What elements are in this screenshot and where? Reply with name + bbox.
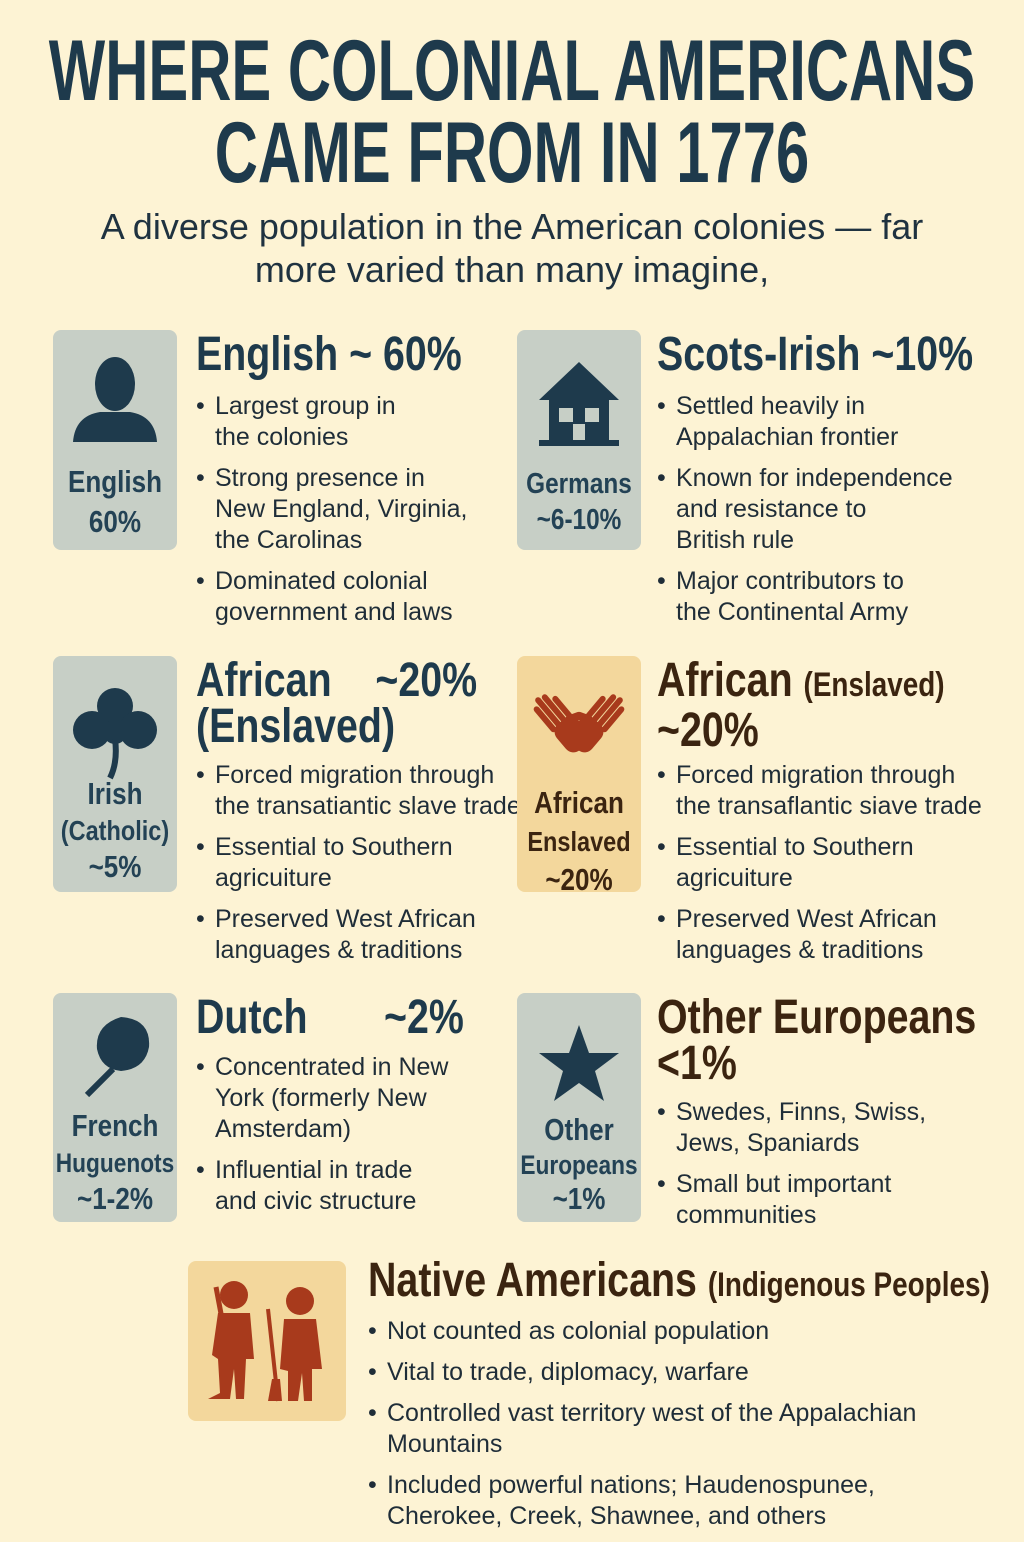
icon box: French Huguenots: Huguenots xyxy=(56,1148,174,1178)
bullets: Amsterdam) xyxy=(215,1115,351,1143)
bullets: government and laws xyxy=(215,598,453,626)
bullets: Vital to trade, diplomacy, warfare xyxy=(387,1358,749,1386)
bullets: York (formerly New xyxy=(215,1084,427,1112)
panel: Other Europeans xyxy=(517,991,976,1229)
heading: ~20% xyxy=(657,704,759,757)
bullets: agricuiture xyxy=(676,864,793,892)
heading: African ~20% xyxy=(196,654,477,707)
heading: <1% xyxy=(657,1037,737,1090)
icon: tulip xyxy=(84,1017,150,1097)
icon: house xyxy=(539,362,619,446)
title xyxy=(48,23,975,201)
icon box: English: 60% xyxy=(89,504,141,539)
subtitle: A diverse population in the American colonies — far xyxy=(101,206,923,247)
icon box: Irish: (Catholic) xyxy=(61,815,169,846)
bullets: Concentrated in New xyxy=(215,1053,448,1081)
icon box: Other Europeans: Europeans xyxy=(520,1150,638,1180)
icon box: African Enslaved: African xyxy=(534,785,624,820)
bullets xyxy=(658,761,982,964)
bullets: the Carolinas xyxy=(215,526,362,554)
heading: English ~ 60% xyxy=(196,328,462,381)
bullets: Essential to Southern xyxy=(215,833,453,861)
bullets: Not counted as colonial population xyxy=(387,1317,769,1345)
icon box: English xyxy=(53,330,177,550)
heading: (Enslaved) xyxy=(196,700,395,753)
heading xyxy=(196,654,477,753)
subtitle: more varied than many imagine, xyxy=(255,249,769,290)
bullets: Essential to Southern xyxy=(676,833,914,861)
bullets: languages & traditions xyxy=(676,936,923,964)
panel: African (left) xyxy=(53,654,521,964)
bullets: Swedes, Finns, Swiss, xyxy=(676,1098,926,1126)
bullets: Small but important xyxy=(676,1170,891,1198)
bullets: Forced migration through xyxy=(676,761,955,789)
bullets: Forced migration through xyxy=(215,761,494,789)
icon box: Germans xyxy=(517,330,641,550)
bullets xyxy=(369,1317,916,1530)
icon: person xyxy=(73,357,157,442)
bullets: Largest group in xyxy=(215,392,396,420)
bullets xyxy=(658,1098,926,1229)
icon box: English: English xyxy=(68,464,162,499)
bullets: Known for independence xyxy=(676,464,953,492)
icon box: Irish: Irish xyxy=(88,776,142,811)
bullets: Major contributors to xyxy=(676,567,904,595)
icon box: Irish xyxy=(53,656,177,892)
icon box: Germans: Germans xyxy=(526,468,632,500)
bullets: communities xyxy=(676,1201,816,1229)
panel: Dutch xyxy=(53,991,464,1222)
heading: Native Americans (Indigenous Peoples) xyxy=(368,1254,990,1307)
bullets xyxy=(197,392,467,626)
subtitle xyxy=(100,206,923,290)
bullets: Jews, Spaniards xyxy=(676,1129,859,1157)
title: WHERE COLONIAL AMERICANS xyxy=(49,23,975,119)
bullets: Settled heavily in xyxy=(676,392,865,420)
icon box: Irish: ~5% xyxy=(89,849,141,884)
bullets: the transaflantic siave trade xyxy=(676,792,982,820)
heading xyxy=(657,991,976,1090)
bullets xyxy=(658,392,953,626)
heading: African (Enslaved) xyxy=(657,654,945,707)
bullets: Preserved West African xyxy=(215,905,476,933)
icon box: French Huguenots xyxy=(53,993,177,1222)
bullets: Strong presence in xyxy=(215,464,425,492)
heading xyxy=(657,654,945,757)
bullets: Controlled vast territory west of the Appalachian xyxy=(387,1399,916,1427)
icon box: Other Europeans: Other xyxy=(544,1112,614,1147)
icon: two figures xyxy=(208,1281,322,1402)
icon: star xyxy=(539,1025,619,1101)
bullets: British rule xyxy=(676,526,794,554)
heading: Other Europeans xyxy=(657,991,976,1044)
bullets: New England, Virginia, xyxy=(215,495,467,523)
icon box: Other Europeans: ~1% xyxy=(553,1181,605,1216)
bullets: the colonies xyxy=(215,423,348,451)
panel: African (right) xyxy=(517,654,982,964)
bullets: agricuiture xyxy=(215,864,332,892)
icon box: African Enslaved xyxy=(517,656,641,892)
bullets: and resistance to xyxy=(676,495,866,523)
bullets: languages & traditions xyxy=(215,936,462,964)
bullets: the transatiantic slave trade xyxy=(215,792,521,820)
heading: Dutch ~2% xyxy=(196,991,464,1044)
icon box: French Huguenots: French xyxy=(72,1108,158,1143)
bullets: the Continental Army xyxy=(676,598,908,626)
icon: crossed hands xyxy=(534,694,624,752)
panel: Scots-Irish xyxy=(517,328,973,626)
bullets: Included powerful nations; Haudenospunee, xyxy=(387,1471,875,1499)
bullets: Dominated colonial xyxy=(215,567,428,595)
bullets xyxy=(197,761,521,964)
icon box: Other Europeans xyxy=(517,993,641,1222)
panel: Native Americans xyxy=(188,1254,990,1530)
icon box: African Enslaved: Enslaved xyxy=(527,826,631,857)
bullets: Appalachian frontier xyxy=(676,423,898,451)
bullets: Cherokee, Creek, Shawnee, and others xyxy=(387,1502,826,1530)
title: CAME FROM IN 1776 xyxy=(215,105,809,201)
bullets: Preserved West African xyxy=(676,905,937,933)
bullets: Mountains xyxy=(387,1430,502,1458)
bullets: and civic structure xyxy=(215,1187,416,1215)
bullets xyxy=(197,1053,448,1215)
icon box: African Enslaved: ~20% xyxy=(545,862,613,897)
heading: Scots-Irish ~10% xyxy=(657,328,973,381)
icon box: Native figures xyxy=(188,1261,346,1421)
icon box: French Huguenots: ~1-2% xyxy=(77,1181,153,1216)
panel: English xyxy=(53,328,467,626)
icon: shamrock xyxy=(73,688,157,780)
icon box: Germans: ~6-10% xyxy=(537,504,621,536)
bullets: Influential in trade xyxy=(215,1156,412,1184)
